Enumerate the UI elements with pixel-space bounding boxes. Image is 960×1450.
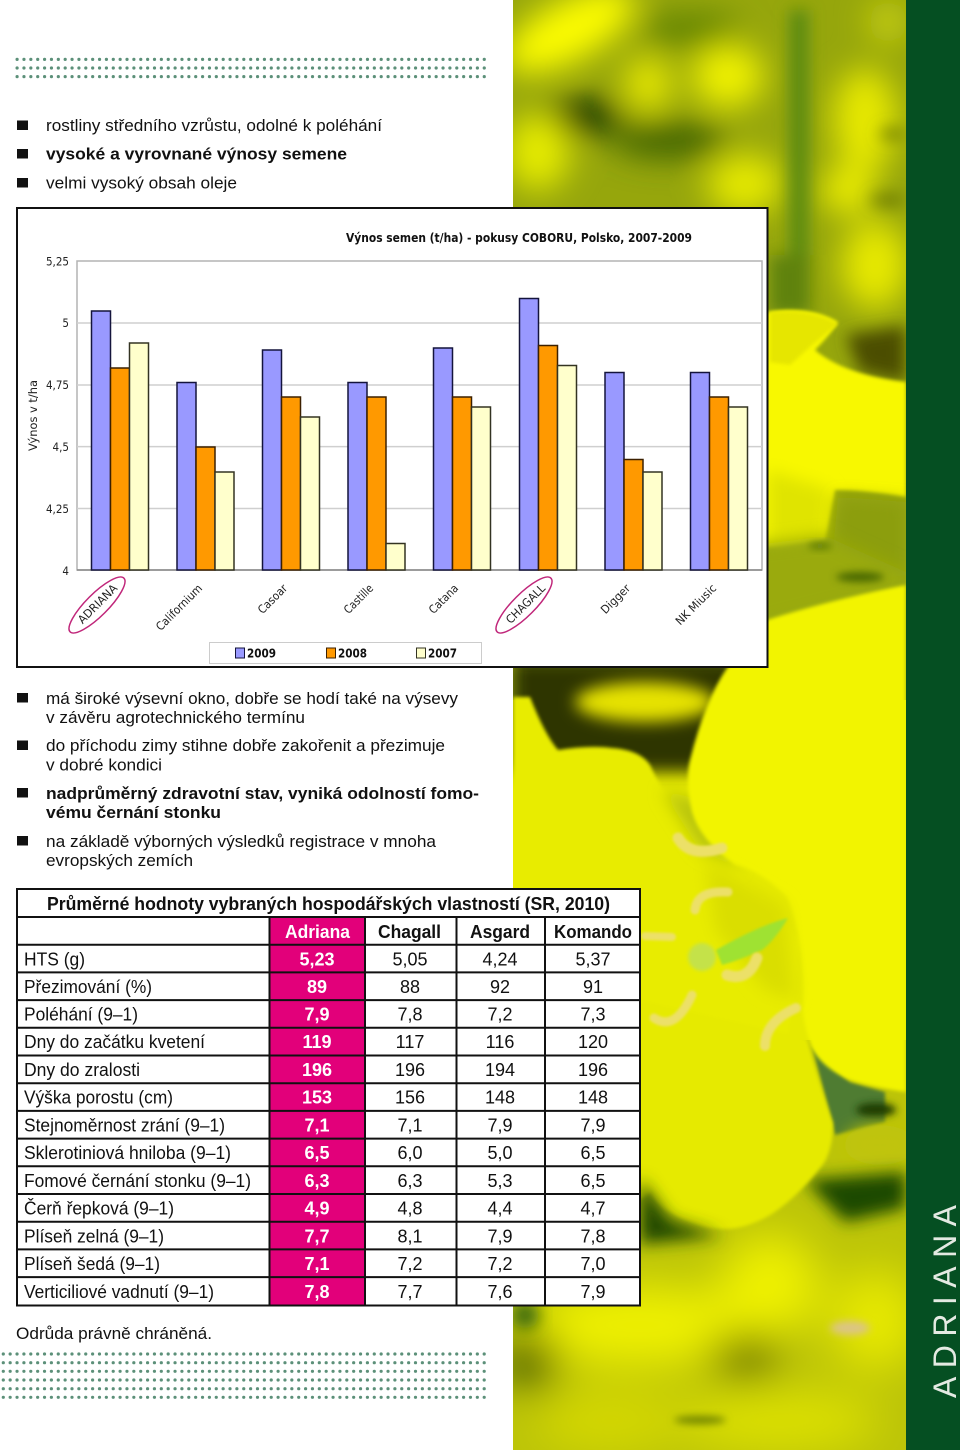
column values: Adriana: 119 [302,1032,332,1052]
photo: lower petal [652,1040,836,1230]
bullet list: top: velmi vysoký obsah oleje [46,174,237,192]
column values: Chagall [392,950,428,1302]
column values: Komando: 5,37 [575,950,611,970]
row labels: Plíseň zelná (9–1) [24,1226,164,1246]
dotted strip: top [17,59,485,77]
table grid [17,917,640,1306]
column values: Asgard: 92 [490,977,510,997]
column values: Asgard: 5,0 [487,1143,513,1163]
table header: Adriana [285,922,351,942]
column values: Komando: 7,8 [580,1226,606,1246]
column values: Adriana: 196 [302,1060,332,1080]
x axis labels: Castille [341,581,376,617]
column values: Komando: 6,5 [580,1143,606,1163]
column values: Komando: 7,0 [580,1254,606,1274]
column values: Chagall: 156 [395,1088,425,1108]
row labels: Sklerotiniová hniloba (9–1) [24,1143,231,1163]
bars [92,298,748,570]
column values: Chagall: 7,2 [397,1254,423,1274]
column values: Chagall: 6,0 [397,1143,423,1163]
bullet list: top [17,116,382,192]
column values: Chagall: 7,7 [397,1282,423,1302]
highlight ellipse: CHAGALL [489,570,559,640]
y axis labels: 5 [62,316,69,330]
legend: 2009 [247,646,276,660]
column values: Adriana: 89 [307,977,327,997]
table header: Asgard [470,922,530,942]
column values: Chagall: 196 [395,1060,425,1080]
bullet list: middle: evropských zemích [46,851,193,870]
row labels: Poléhání (9–1) [24,1004,138,1024]
column values: Asgard: 4,4 [487,1198,513,1218]
column values: Komando: 196 [578,1060,608,1080]
column values: Chagall: 7,8 [397,1004,423,1024]
column values: Adriana: 153 [302,1088,332,1108]
y axis labels: 4,25 [46,502,69,516]
column values: Komando: 120 [578,1032,608,1052]
row labels: Dny do začátku kvetení [24,1032,205,1052]
column values: Komando: 6,5 [580,1171,606,1191]
column values: Chagall: 5,05 [392,950,428,970]
bullet list: middle: v dobré kondici [46,756,162,774]
x axis labels [75,581,719,634]
row labels: HTS (g) [24,950,85,970]
bullet list: middle: nadprůměrný zdravotní stav, vyniká odolností fomo- [46,784,479,803]
y axis labels: 4 [62,564,69,578]
photo: green gap between petals [826,487,904,558]
x axis labels: Casoar [255,581,291,617]
chart title: Výnos semen (t/ha) - pokusy COBORU, Polsko, 2007-2009 [346,231,692,245]
column values: Komando: 148 [578,1088,608,1108]
table title: Průměrné hodnoty vybraných hospodářských vlastností (SR, 2010) [47,894,610,914]
column values: Asgard: 4,24 [482,950,518,970]
legend: 2007 [428,646,457,660]
dotted strip: bottom [3,1354,485,1397]
column values: Adriana: 5,23 [299,950,335,970]
y axis labels: 4,75 [46,378,69,392]
bullet list: middle: do příchodu zimy stihne dobře zakořenit a přezimuje [46,736,445,755]
bullet list: middle: v závěru agrotechnického termínu [46,708,305,727]
column values: Adriana: 7,9 [304,1004,330,1024]
column values: Adriana: 7,8 [304,1282,330,1302]
column values: Komando: 91 [583,977,603,997]
table: agronomic traits [17,889,640,1306]
x axis labels: CHAGALL [503,581,548,626]
column values: Adriana: 7,7 [304,1226,330,1246]
column values: Adriana: 6,3 [304,1171,330,1191]
row labels: Přezimování (%) [24,977,152,997]
bullet list: middle: má široké výsevní okno, dobře se hodí také na výsevy [46,689,458,708]
row labels: Verticiliové vadnutí (9–1) [24,1282,214,1302]
x axis labels: Catana [426,581,461,617]
row labels: Dny do zralosti [24,1060,140,1080]
column values: Adriana [299,950,335,1302]
highlight ellipse: ADRIANA [62,570,132,640]
y axis title: Výnos v t/ha [26,380,40,451]
column values: Asgard: 7,9 [487,1226,513,1246]
bullet list: middle: na základě výborných výsledků registrace v mnoha [46,832,437,851]
table header [285,922,632,942]
table header: Komando [554,922,632,942]
column values: Komando: 7,3 [580,1004,606,1024]
side band: dark green [906,0,960,1450]
legend: 2008 [338,646,367,660]
photo: left petal [513,694,660,1200]
photo: pistil and stamens [645,838,796,1046]
column values: Komando: 7,9 [580,1282,606,1302]
column values: Komando: 7,9 [580,1116,606,1136]
table header: Chagall [378,922,441,942]
column values: Adriana: 7,1 [304,1116,330,1136]
column values: Komando: 4,7 [580,1198,606,1218]
bullet list: top: rostliny středního vzrůstu, odolné k poléhání [46,116,382,135]
x axis labels: Californium [153,581,205,634]
row labels: Plíseň šedá (9–1) [24,1254,160,1274]
table highlight column: Adriana [270,917,365,1306]
column values: Adriana: 7,1 [304,1254,330,1274]
y axis labels: 5,25 [46,254,69,268]
row labels: Fomové černání stonku (9–1) [24,1171,251,1191]
photo: seam between petals [662,790,740,870]
y axis labels [46,254,69,578]
column values: Adriana: 4,9 [304,1198,330,1218]
column values: Chagall: 8,1 [397,1226,423,1246]
photo: lower background shadows [506,1046,920,1450]
row labels: Stejnoměrnost zrání (9–1) [24,1116,225,1136]
panel: yield bar chart [17,208,768,667]
photo: top right petal [688,585,906,1092]
column values: Asgard: 148 [485,1088,515,1108]
x axis labels: NK Miusic [672,581,719,628]
column values: Chagall: 6,3 [397,1171,423,1191]
column values: Chagall: 7,1 [397,1116,423,1136]
column values: Asgard: 194 [485,1060,515,1080]
footnote: Odrůda právně chráněná. [16,1324,212,1343]
photo: yellow rapeseed flower [492,0,920,1450]
row labels [24,950,251,1302]
column values: Asgard: 7,2 [487,1004,513,1024]
photo: dark area behind lower flower [513,660,745,772]
column values: Asgard [482,950,518,1302]
column values: Asgard: 7,2 [487,1254,513,1274]
column values: Chagall: 4,8 [397,1198,423,1218]
column values: Asgard: 7,6 [487,1282,513,1302]
column values: Chagall: 88 [400,977,420,997]
y axis labels: 4,5 [53,440,69,454]
x axis labels: Digger [598,581,634,617]
column values: Asgard: 7,9 [487,1116,513,1136]
column values: Asgard: 116 [486,1032,514,1052]
bullet list: middle: vému černání stonku [46,803,221,822]
row labels: Výška porostu (cm) [24,1088,173,1108]
row labels: Čerň řepková (9–1) [24,1198,174,1218]
column values: Asgard: 5,3 [487,1171,513,1191]
bullet list: middle [17,689,479,870]
photo: upper petal [768,308,906,548]
bullet list: top: vysoké a vyrovnané výnosy semene [46,144,347,164]
column values: Adriana: 6,5 [304,1143,330,1163]
legend [210,642,482,664]
x axis labels: ADRIANA [75,581,120,626]
plot area [77,261,762,570]
column values: Komando [575,950,611,1302]
column values: Chagall: 117 [396,1032,424,1052]
